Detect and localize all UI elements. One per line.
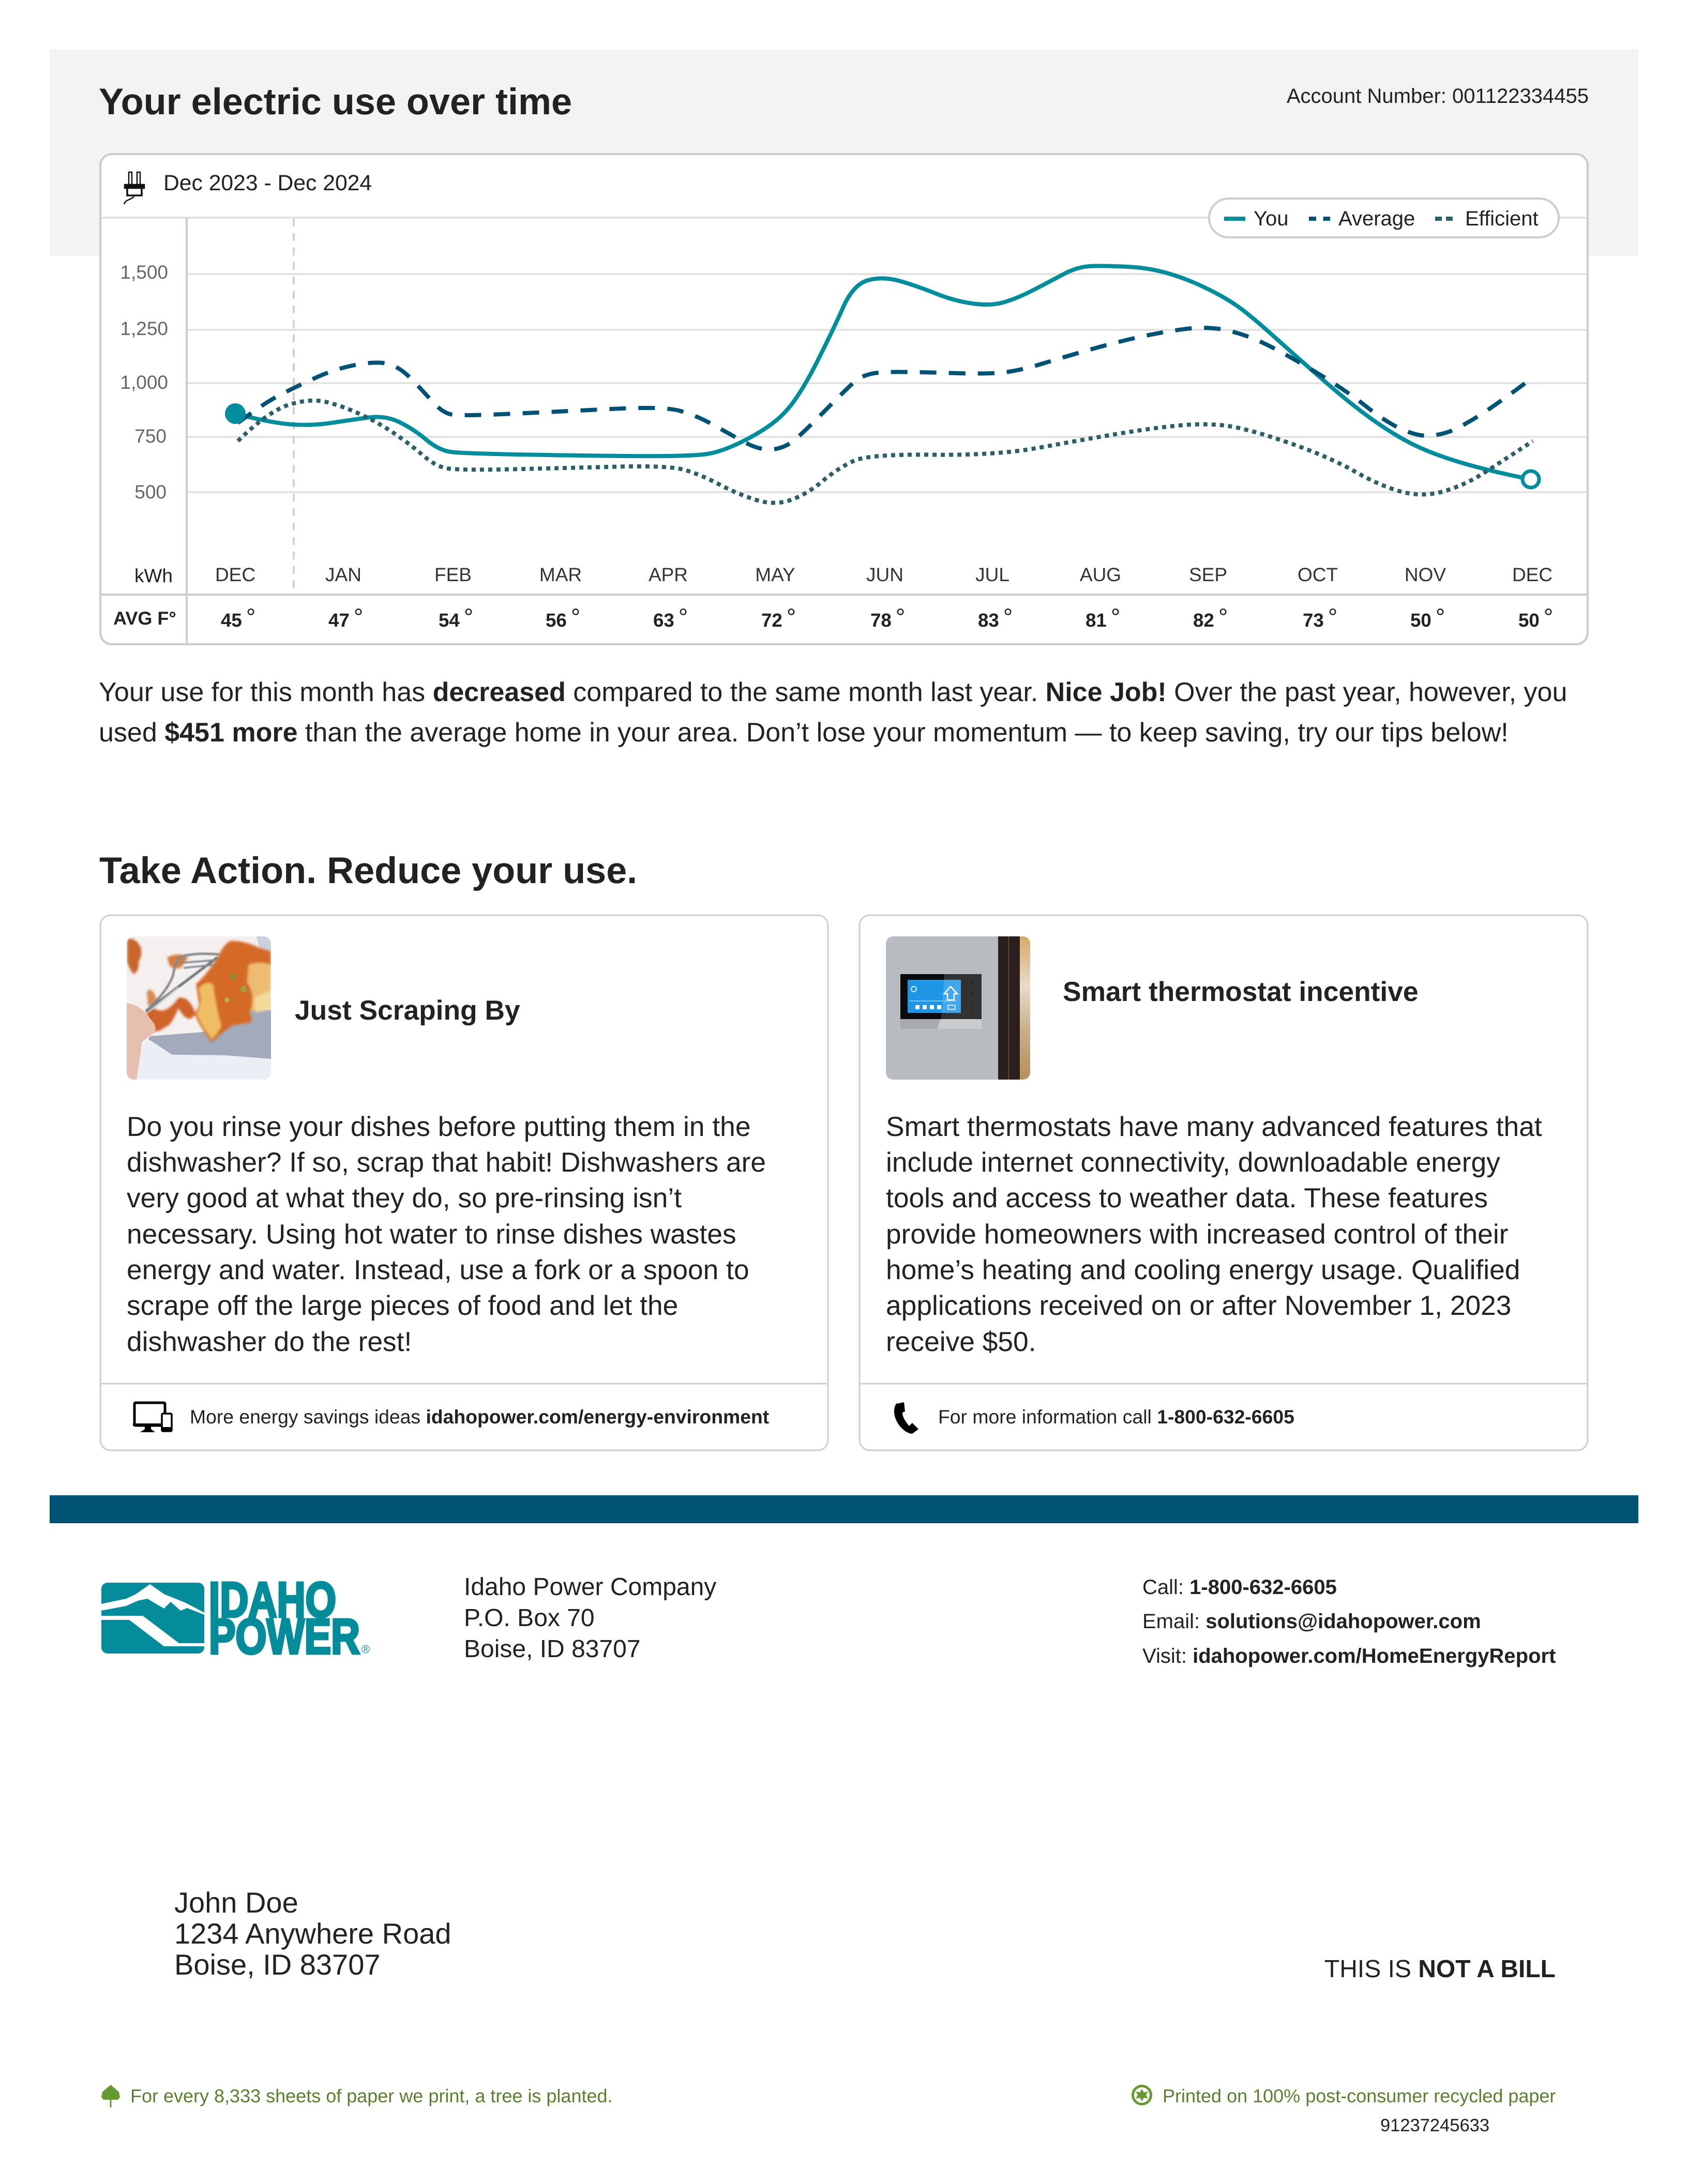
average temperature row: 54 xyxy=(439,610,460,631)
logo: idaho power: ® xyxy=(361,1643,370,1656)
average temperature row: 81 xyxy=(1086,610,1107,631)
contact details: Email: solutions@idahopower.com xyxy=(1142,1610,1481,1633)
legend: You xyxy=(1254,207,1289,230)
start marker xyxy=(225,403,246,424)
body text: very good at what they do, so pre-rinsing isn’t xyxy=(127,1183,682,1214)
legend: Efficient xyxy=(1465,207,1539,230)
recipient address: 1234 Anywhere Road xyxy=(174,1917,451,1950)
month labels: SEP xyxy=(1189,564,1227,585)
divider band xyxy=(50,1495,1638,1523)
footer text: For more information call 1-800-632-6605 xyxy=(938,1406,1294,1428)
image: scraping food off plate xyxy=(127,936,271,1080)
average temperature row: 73 xyxy=(1303,610,1324,631)
body text: include internet connectivity, downloadable energy xyxy=(886,1147,1500,1178)
heading: Just Scraping By xyxy=(295,995,520,1026)
y axis labels: 1,500 xyxy=(120,262,168,283)
average temperature row: ° xyxy=(464,603,473,630)
account number: Account Number: 001122334455 xyxy=(1287,85,1589,108)
logo: idaho power: POWER xyxy=(209,1609,360,1664)
month labels: JUN xyxy=(866,564,903,585)
average temperature row: ° xyxy=(1218,603,1228,630)
month labels: FEB xyxy=(434,564,472,585)
average temperature row: ° xyxy=(1328,603,1337,630)
body text: Smart thermostats have many advanced features that xyxy=(886,1112,1542,1142)
company address: P.O. Box 70 xyxy=(464,1604,595,1632)
average temperature row: ° xyxy=(787,603,796,630)
month labels: NOV xyxy=(1405,564,1446,585)
y axis labels: kWh xyxy=(134,565,173,586)
y axis labels: 1,250 xyxy=(120,318,168,339)
body text: necessary. Using hot water to rinse dishes wastes xyxy=(127,1219,736,1250)
header panel xyxy=(50,50,1638,256)
end marker xyxy=(1523,471,1539,488)
logo: idaho power: IDAHO xyxy=(209,1572,336,1628)
summary paragraph xyxy=(99,677,1567,748)
month labels: DEC xyxy=(215,564,255,585)
recipient address: Boise, ID 83707 xyxy=(174,1948,380,1981)
summary paragraph: Your use for this month has decreased compared to the same month last year. Nice Job! Over the past year, however, you xyxy=(99,677,1567,707)
body text: scrape off the large pieces of food and let the xyxy=(127,1291,678,1321)
image: smart thermostat on wall xyxy=(886,936,1030,1080)
icon: recycling xyxy=(1133,2086,1151,2104)
legend xyxy=(1209,199,1559,237)
icon: computer and phone xyxy=(133,1403,172,1432)
body text: energy and water. Instead, use a fork or a spoon to xyxy=(127,1255,749,1285)
body text: tools and access to weather data. These features xyxy=(886,1183,1488,1214)
contact details xyxy=(1142,1576,1556,1667)
month labels: JUL xyxy=(975,564,1009,585)
body text: dishwasher do the rest! xyxy=(127,1327,412,1357)
average temperature row: 50 xyxy=(1410,610,1431,631)
average temperature row: ° xyxy=(571,603,580,630)
month labels: MAR xyxy=(539,564,582,585)
average temperature row: 50 xyxy=(1518,610,1540,631)
average temperature row: ° xyxy=(246,603,255,630)
average temperature row: 56 xyxy=(546,610,567,631)
line: average xyxy=(238,328,1527,449)
average temperature row: ° xyxy=(354,603,363,630)
y axis labels: 1,000 xyxy=(120,372,168,393)
average temperature row: ° xyxy=(1436,603,1445,630)
y axis labels xyxy=(120,262,173,586)
logo: idaho power xyxy=(101,1572,370,1664)
y axis labels: 500 xyxy=(134,481,167,503)
month labels xyxy=(215,564,1553,585)
section heading: Take Action. Reduce your use. xyxy=(99,850,637,891)
recipient address xyxy=(174,1886,451,1981)
body text xyxy=(886,1112,1542,1357)
tree planting note: For every 8,333 sheets of paper we print, a tree is planted. xyxy=(130,2085,613,2106)
average temperature row: 82 xyxy=(1193,610,1214,631)
average temperature row xyxy=(113,603,1553,631)
line: efficient xyxy=(238,401,1533,503)
not a bill notice: THIS IS NOT A BILL xyxy=(1324,1955,1556,1983)
icon: tree xyxy=(101,2085,120,2107)
icon: telephone handset xyxy=(894,1402,918,1434)
icon: plug xyxy=(124,172,144,204)
average temperature row: 78 xyxy=(870,610,892,631)
contact details: Call: 1-800-632-6605 xyxy=(1142,1576,1337,1599)
company address: Idaho Power Company xyxy=(464,1573,716,1601)
average temperature row: ° xyxy=(1003,603,1013,630)
average temperature row: ° xyxy=(679,603,688,630)
average temperature row: ° xyxy=(1111,603,1120,630)
recipient address: John Doe xyxy=(174,1886,298,1919)
average temperature row: ° xyxy=(1544,603,1553,630)
company address xyxy=(464,1573,716,1663)
footer text: More energy savings ideas idahopower.com/energy-environment xyxy=(190,1406,769,1428)
recycled paper note: Printed on 100% post-consumer recycled paper xyxy=(1163,2085,1556,2106)
body text: home’s heating and cooling energy usage. Qualified xyxy=(886,1255,1520,1285)
contact details: Visit: idahopower.com/HomeEnergyReport xyxy=(1142,1645,1556,1667)
heading: Smart thermostat incentive xyxy=(1063,977,1419,1007)
average temperature row: 63 xyxy=(653,610,674,631)
body text: provide homeowners with increased control of their xyxy=(886,1219,1508,1250)
legend: Average xyxy=(1338,207,1415,230)
month labels: AUG xyxy=(1080,564,1121,585)
average temperature row: 72 xyxy=(761,610,782,631)
body text: Do you rinse your dishes before putting them in the xyxy=(127,1112,751,1142)
company address: Boise, ID 83707 xyxy=(464,1635,641,1663)
line: you xyxy=(235,266,1530,479)
body text xyxy=(127,1112,766,1357)
body text: applications received on or after November 1, 2023 xyxy=(886,1291,1511,1321)
average temperature row: 47 xyxy=(328,610,350,631)
month labels: JAN xyxy=(325,564,361,585)
average temperature row: 83 xyxy=(978,610,999,631)
average temperature row: AVG F° xyxy=(113,608,176,629)
panel: tip smart thermostat xyxy=(860,915,1588,1450)
title: Your electric use over time xyxy=(99,81,572,123)
month labels: APR xyxy=(649,564,688,585)
panel: tip just scraping by xyxy=(100,915,828,1450)
date range: Dec 2023 - Dec 2024 xyxy=(163,171,372,195)
usage chart panel xyxy=(100,154,1588,644)
month labels: MAY xyxy=(755,564,795,585)
document number: 91237245633 xyxy=(1380,2116,1489,2135)
body text: receive $50. xyxy=(886,1327,1036,1357)
body text: dishwasher? If so, scrap that habit! Dishwashers are xyxy=(127,1147,766,1178)
month labels: OCT xyxy=(1298,564,1338,585)
month labels: DEC xyxy=(1512,564,1553,585)
y axis labels: 750 xyxy=(134,426,167,447)
average temperature row: ° xyxy=(896,603,905,630)
average temperature row: 45 xyxy=(221,610,242,631)
summary paragraph: used $451 more than the average home in your area. Don’t lose your momentum — to keep saving, try our tips below! xyxy=(99,718,1509,748)
